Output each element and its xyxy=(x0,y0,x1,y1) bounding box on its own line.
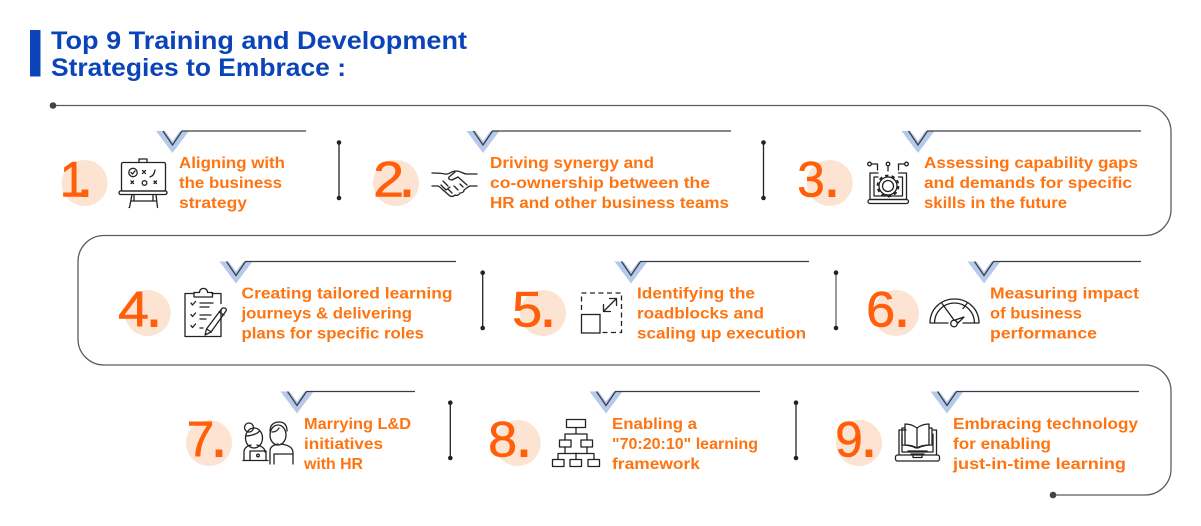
panel: strategy 9 xyxy=(835,392,1139,473)
description: Identifying the xyxy=(637,286,755,302)
chevron and rule xyxy=(156,131,306,153)
icon: org chart xyxy=(552,420,600,466)
number 4 xyxy=(118,264,171,342)
description: "70:20:10" learning xyxy=(612,436,758,453)
description: Marrying L&D xyxy=(304,416,411,433)
number 2: 2 xyxy=(373,152,404,208)
number 5: . xyxy=(538,264,558,342)
description: initiatives xyxy=(304,436,383,453)
number 4: . xyxy=(144,264,164,342)
icon: scale up squares xyxy=(582,293,622,333)
panel: strategy 7 xyxy=(186,392,415,473)
description: Enabling a xyxy=(612,416,697,433)
icon: two people with laptop xyxy=(243,422,293,464)
description: journeys & delivering xyxy=(240,306,412,322)
number 2 xyxy=(373,134,419,212)
icon: handshake xyxy=(432,171,477,196)
number 3 xyxy=(797,134,853,212)
description: Creating tailored learning xyxy=(242,286,452,302)
description: Assessing capability gaps xyxy=(924,155,1138,172)
description: of business xyxy=(990,306,1082,322)
icon: gauge xyxy=(930,299,979,327)
chevron and rule xyxy=(930,392,1139,414)
number 6: . xyxy=(892,264,912,342)
panel: strategy 2 xyxy=(373,131,731,212)
chevron and rule xyxy=(968,262,1141,284)
divider xyxy=(337,140,341,200)
description: strategy xyxy=(179,195,247,212)
number 8: 8 xyxy=(488,412,517,468)
divider xyxy=(448,400,453,460)
number 9: 9 xyxy=(835,412,863,468)
number 2: . xyxy=(397,134,417,212)
description: scaling up execution xyxy=(637,326,806,342)
number 1 xyxy=(60,134,108,212)
icon: laptop with gear xyxy=(868,162,908,204)
title text: Top 9 Training and Development xyxy=(51,27,468,55)
panel: strategy 6 xyxy=(866,262,1141,342)
description: and demands for specific xyxy=(924,175,1132,192)
description: HR and other business teams xyxy=(490,195,729,212)
icon: strategy board xyxy=(119,159,167,208)
number 7 xyxy=(186,394,232,472)
panel: strategy 3 xyxy=(797,131,1141,212)
description: Embracing technology xyxy=(953,416,1138,433)
panel: strategy 8 xyxy=(488,392,760,473)
chevron and rule xyxy=(280,392,415,414)
icon: book on laptop xyxy=(896,424,940,461)
title text: Strategies to Embrace : xyxy=(51,54,346,82)
number 3: 3 xyxy=(797,152,825,208)
description: just-in-time learning xyxy=(952,456,1126,473)
divider xyxy=(794,400,798,460)
number 7: . xyxy=(209,394,229,472)
divider xyxy=(761,140,766,200)
number 1: . xyxy=(75,134,95,212)
description: co-ownership between the xyxy=(490,175,710,192)
panel: strategy 1 xyxy=(60,131,306,212)
description: Aligning with xyxy=(179,155,285,172)
description: performance xyxy=(990,326,1097,342)
number 5 xyxy=(512,264,566,342)
description: the business xyxy=(179,175,282,192)
number 8: . xyxy=(514,394,534,472)
divider xyxy=(480,270,485,330)
number 6 xyxy=(866,264,919,342)
number 1: 1 xyxy=(60,152,87,208)
description: plans for specific roles xyxy=(242,326,424,342)
description: Measuring impact xyxy=(990,286,1139,302)
heading accent bar xyxy=(30,30,40,76)
panel: strategy 5 xyxy=(512,262,809,342)
description: skills in the future xyxy=(924,195,1067,212)
number 4: 4 xyxy=(118,282,149,338)
description: roadblocks and xyxy=(637,306,764,322)
number 5: 5 xyxy=(512,282,542,338)
number 7: 7 xyxy=(187,412,214,468)
chevron and rule xyxy=(466,131,731,153)
number 9: . xyxy=(859,394,879,472)
chevron and rule xyxy=(220,262,456,284)
chevron and rule xyxy=(614,262,809,284)
number 9 xyxy=(835,394,882,472)
description: framework xyxy=(612,456,700,473)
description: for enabling xyxy=(953,436,1051,453)
description: Driving synergy and xyxy=(490,155,654,172)
chevron and rule xyxy=(902,131,1141,153)
heading xyxy=(30,27,468,82)
panel: strategy 4 xyxy=(118,262,456,342)
chevron and rule xyxy=(590,392,760,414)
number 3: . xyxy=(822,134,842,212)
description: with HR xyxy=(303,456,363,473)
serpentine connector line xyxy=(50,102,1171,498)
number 6: 6 xyxy=(866,282,895,338)
number 8 xyxy=(488,394,541,472)
icon: clipboard and pencil xyxy=(185,288,226,336)
divider xyxy=(834,270,838,330)
